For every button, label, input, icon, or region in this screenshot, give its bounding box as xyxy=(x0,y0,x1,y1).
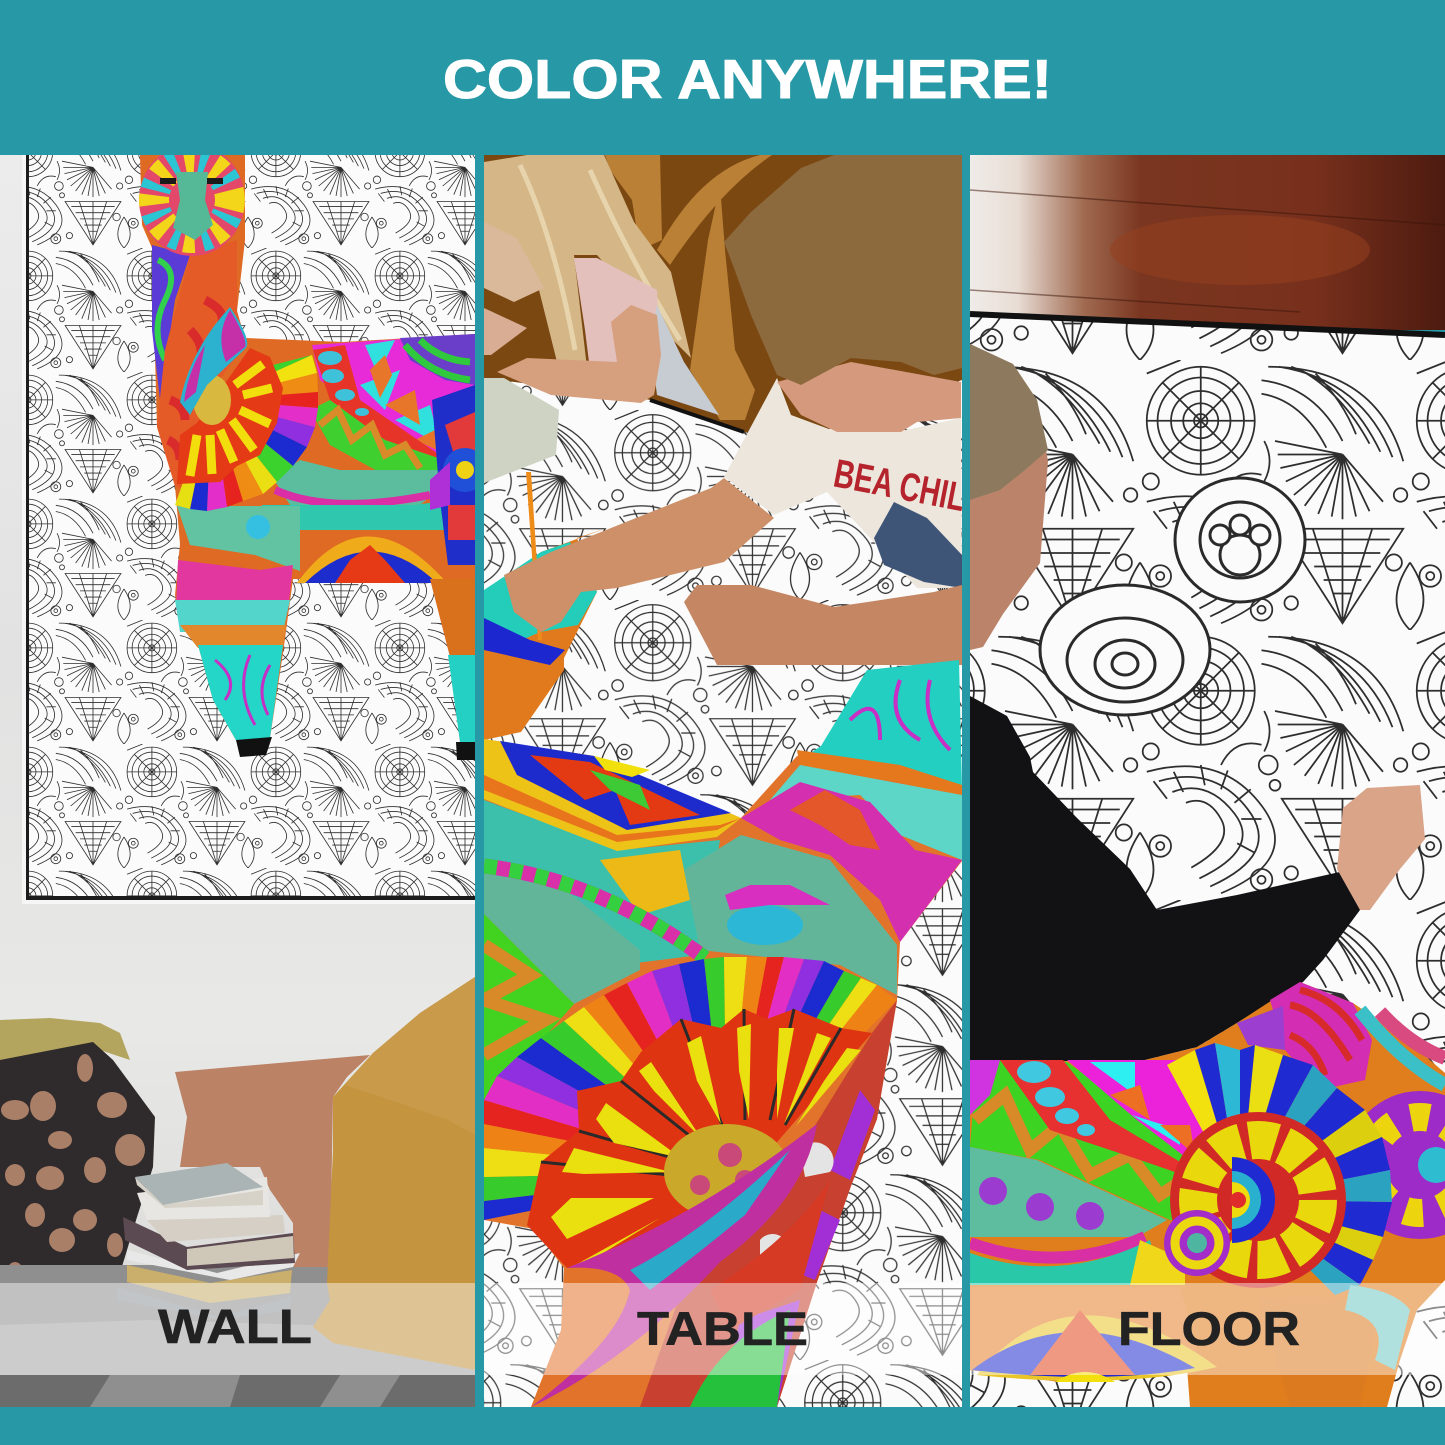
hair highlights xyxy=(520,165,680,350)
boy xyxy=(504,155,986,665)
leg swirls xyxy=(215,655,270,725)
orange chevrons xyxy=(370,355,436,450)
wall background xyxy=(0,155,475,1265)
yellow patch xyxy=(1130,1240,1185,1285)
spiral teal centre xyxy=(1187,1233,1207,1253)
boy's other arm xyxy=(684,585,962,665)
man's hair xyxy=(970,344,1048,500)
table line art xyxy=(484,155,962,1407)
pencil xyxy=(526,472,542,640)
man's head xyxy=(970,344,1048,650)
coloured llama body xyxy=(970,982,1445,1407)
label strip: floor xyxy=(970,1283,1445,1375)
center seafoam xyxy=(684,835,897,995)
bean bag chair xyxy=(313,977,475,1370)
label: wall: WALL xyxy=(158,1301,312,1354)
top right panel xyxy=(400,334,475,385)
rainbow fan xyxy=(484,957,897,1407)
zigzag panel xyxy=(484,914,574,1105)
white arc accents xyxy=(760,1142,834,1265)
belly dome xyxy=(484,739,741,851)
leg green bottom xyxy=(690,1310,790,1407)
girl's face xyxy=(484,222,544,302)
white striped fan xyxy=(1237,1006,1285,1050)
dome star xyxy=(530,755,700,825)
hooves xyxy=(236,737,475,760)
feather red arcs xyxy=(710,1180,830,1330)
stripe arc green xyxy=(484,866,705,958)
orange scallop strip xyxy=(797,750,962,800)
girl's pink shirt xyxy=(574,258,660,370)
center blue swirl xyxy=(727,905,803,945)
yellow rays xyxy=(551,1024,861,1268)
bottom banner xyxy=(0,1407,1445,1445)
teal white scallops xyxy=(770,765,962,860)
boy's face xyxy=(777,362,961,432)
llama foot teal xyxy=(484,542,597,650)
red oval strip xyxy=(1000,1060,1227,1190)
llama neck swirl xyxy=(158,260,171,360)
red petal ring xyxy=(1170,1112,1346,1288)
hub dots xyxy=(690,1143,755,1195)
chest band xyxy=(176,560,293,610)
panel: wall xyxy=(0,144,487,1407)
llama eyes xyxy=(160,178,223,184)
colored base xyxy=(484,739,962,1407)
feather magenta stripes xyxy=(184,310,245,402)
mid seafoam panel xyxy=(273,460,450,505)
header banner xyxy=(0,0,1445,155)
cyan ovals xyxy=(318,351,369,416)
flower stars xyxy=(979,1177,1104,1230)
right flower xyxy=(430,385,487,565)
magenta fringe xyxy=(741,782,962,942)
teal ring xyxy=(1203,1171,1261,1229)
girl with blond hair xyxy=(484,155,719,415)
stack of books xyxy=(117,1163,300,1320)
wooden chairs background xyxy=(484,155,962,440)
zigzag panel xyxy=(314,400,438,470)
rainbow fan xyxy=(175,348,318,511)
llama neck stripes xyxy=(157,240,245,490)
dome orange edge xyxy=(484,775,741,842)
flower yellow petals xyxy=(1372,1117,1445,1213)
outer flower feathers xyxy=(1167,1043,1392,1295)
dome blue xyxy=(500,741,731,830)
hand with crayon xyxy=(1337,785,1425,910)
zigzag stripes xyxy=(975,1095,1225,1205)
belly dome xyxy=(297,536,447,583)
llama body base xyxy=(140,155,475,742)
coloring poster on wall xyxy=(22,155,482,904)
boy shirt xyxy=(724,378,962,588)
left seafoam xyxy=(484,870,640,1004)
zigzag lines xyxy=(484,945,545,1055)
panel: floor xyxy=(970,155,1445,1407)
chest seafoam xyxy=(177,506,300,571)
flower teal center xyxy=(1418,1147,1445,1183)
central mandala xyxy=(1175,478,1305,602)
right purple flower xyxy=(1346,1091,1445,1239)
red wood grain xyxy=(1110,215,1370,285)
llama foot blue scallop xyxy=(484,618,565,665)
zigzag panel xyxy=(970,1060,1230,1220)
lower dome blue xyxy=(972,1332,1195,1377)
spiral disc xyxy=(1164,1210,1230,1276)
colored llama foot under hand xyxy=(484,528,607,740)
mane yellow stripes xyxy=(154,162,230,238)
coloured llama belly and fan xyxy=(484,660,962,1407)
stripe arc xyxy=(484,866,705,958)
front leg xyxy=(198,645,283,742)
feather magenta xyxy=(531,1124,817,1407)
llama feather xyxy=(180,307,247,415)
label strip: wall xyxy=(0,1283,475,1375)
fringe orange xyxy=(790,790,880,850)
red oval strip xyxy=(313,345,436,458)
right lower stripes xyxy=(640,1000,897,1407)
girl's arm xyxy=(497,305,661,403)
belly dome star xyxy=(335,545,405,583)
magenta scallops xyxy=(1270,982,1372,1090)
shirt whale xyxy=(874,502,962,588)
dome sun xyxy=(594,756,650,777)
panel: table xyxy=(484,155,986,1407)
lower dome star xyxy=(1030,1310,1135,1375)
purple stripe accents xyxy=(720,1090,875,1407)
dome green leaves xyxy=(590,770,650,810)
girl's other hand xyxy=(484,308,527,355)
orange scallop xyxy=(180,625,286,648)
yellow ring xyxy=(1214,1182,1250,1218)
girl's striped skirt xyxy=(650,305,719,415)
left scallop region xyxy=(484,800,720,965)
label strip: table xyxy=(484,1283,962,1375)
fan hub xyxy=(193,375,231,425)
back lower leg xyxy=(448,655,475,742)
zigzag stripes xyxy=(320,410,420,468)
fan hub xyxy=(664,1124,790,1220)
blanket on basket xyxy=(0,1018,155,1320)
yellow petals xyxy=(1198,1140,1318,1260)
teal chevrons xyxy=(360,340,434,436)
colored llama xyxy=(139,144,487,760)
teal pink paisley band xyxy=(1360,1010,1445,1085)
bean bag top highlight xyxy=(345,977,475,1135)
teal white scallops xyxy=(1345,1285,1410,1370)
lower flower band xyxy=(970,1287,1200,1382)
mane teal stripes xyxy=(154,162,230,238)
llama head mane xyxy=(139,144,245,256)
stripe band xyxy=(275,490,430,504)
colored base xyxy=(970,982,1445,1407)
shirt lettering: BEA CHILL xyxy=(830,452,986,523)
red scallop arcs xyxy=(1290,990,1362,1075)
black sweater xyxy=(970,696,1360,1062)
blue centre disc xyxy=(1189,1157,1275,1243)
spiral yellow ring xyxy=(1175,1221,1219,1265)
lower dome sun xyxy=(1055,1372,1115,1382)
orange chevrons xyxy=(1110,1085,1225,1190)
teal upper leg xyxy=(800,660,962,789)
chest decoration xyxy=(246,515,270,539)
llama neck purple panel xyxy=(152,245,190,400)
neck red arcs xyxy=(168,300,222,460)
top right green arcs xyxy=(405,340,470,380)
lower dome yellow xyxy=(977,1315,1217,1381)
leg swirls xyxy=(850,680,950,750)
rug on floor xyxy=(0,1265,475,1407)
cyan ovals xyxy=(1017,1061,1095,1136)
red fan petals xyxy=(527,1009,872,1268)
seafoam panel xyxy=(970,1147,1167,1237)
teal scallop xyxy=(175,600,290,632)
poster edge xyxy=(650,400,744,432)
magenta panel xyxy=(1067,1060,1232,1193)
yellow patch xyxy=(600,850,690,915)
petal dividers xyxy=(541,1009,841,1175)
boy's drawing arm xyxy=(504,478,774,632)
boy's hair xyxy=(724,155,962,385)
stripe band xyxy=(970,1237,1145,1258)
poster black edge xyxy=(970,314,1445,335)
plastic crayon box xyxy=(484,378,559,483)
center magenta motif xyxy=(725,885,830,910)
poster line art xyxy=(970,314,1445,1407)
feather teal xyxy=(630,1150,790,1290)
plank joints xyxy=(970,190,1445,312)
llama face xyxy=(173,172,213,240)
label: table: TABLE xyxy=(637,1302,808,1355)
chair rails xyxy=(605,155,772,420)
teal chevrons xyxy=(1090,1062,1215,1178)
green scallops xyxy=(970,1240,1160,1285)
dark patterned throw xyxy=(0,1042,155,1320)
leaf print xyxy=(1,1054,145,1295)
title: COLOR ANYWHERE! xyxy=(443,48,1052,110)
central paisley xyxy=(1040,585,1210,715)
scallop band xyxy=(262,502,444,530)
yellow fan rays xyxy=(190,364,272,476)
cushion xyxy=(175,1055,370,1267)
red dot xyxy=(1230,1192,1246,1208)
lower right orange paisley xyxy=(1260,1297,1380,1407)
wooden floor xyxy=(970,155,1445,330)
left edge stripes xyxy=(970,1060,1000,1115)
upper body magenta xyxy=(312,334,475,460)
belly dome blue xyxy=(305,552,437,583)
pink paisley band xyxy=(1380,1012,1445,1058)
label: floor: FLOOR xyxy=(1118,1302,1300,1355)
red fan petals xyxy=(177,348,283,484)
back leg xyxy=(430,579,475,655)
